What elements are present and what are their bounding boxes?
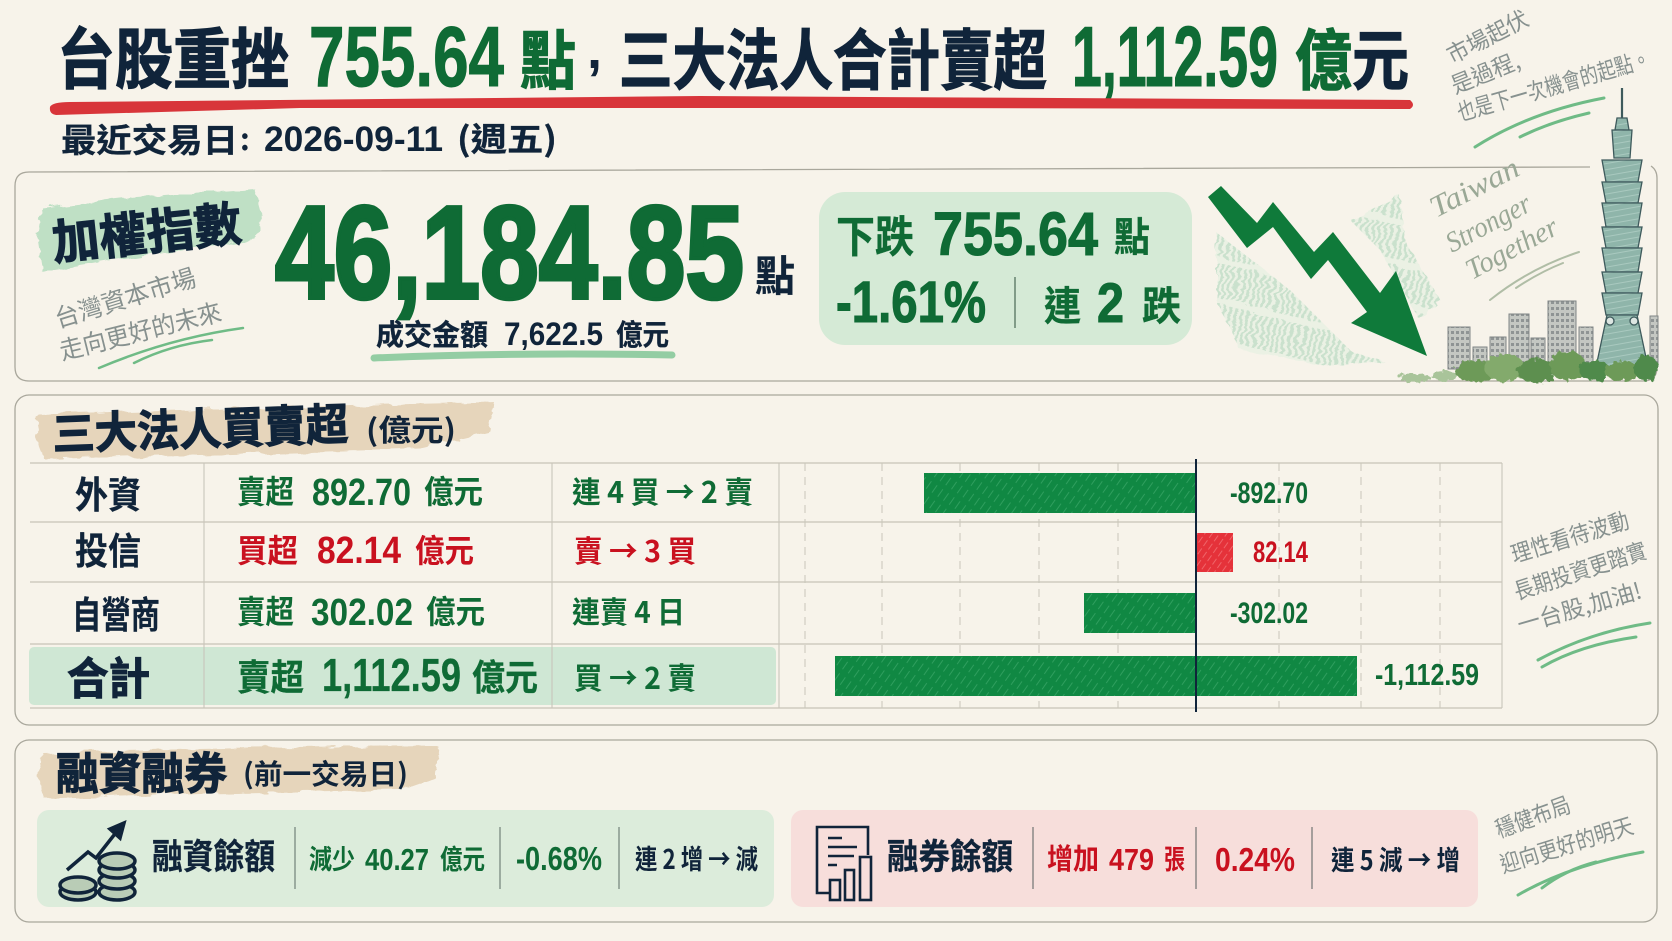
turnover: 億元: [616, 312, 669, 354]
heading: 三大法人買賣超: (億元): [366, 406, 456, 450]
row: investment trust: 投信: [75, 521, 141, 575]
row: foreign investors: 外資: [75, 465, 141, 519]
bar: total -1,112.59: [835, 656, 1479, 696]
row: dealers: 自營商: [72, 585, 160, 639]
change box: 2: [1097, 271, 1124, 334]
bar: foreign -892.70: -892.70: [1230, 477, 1308, 510]
card: short balance: 增加: [1047, 836, 1099, 878]
row: foreign investors: [75, 465, 753, 519]
turnover: 7,622.5: [504, 316, 603, 352]
change box: 跌: [1142, 274, 1181, 332]
change box: 755.64: [933, 200, 1098, 268]
handwritten: Taiwan Stronger Together: Together: [1460, 211, 1564, 286]
latest trading date: 2026-09-11: [264, 120, 443, 159]
index unit: 點: [755, 243, 795, 304]
big index value: 46,184.85: [275, 179, 744, 326]
handwritten note: steady layout: 穩健布局: [1490, 786, 1575, 845]
handwritten note: rational view: 理性看待波動: [1506, 502, 1633, 570]
card: margin balance: -0.68%: [516, 840, 602, 877]
latest trading date: (週五): [457, 113, 557, 161]
title: 755.64: [309, 10, 504, 105]
illustration: city skyline: [1448, 301, 1658, 369]
row: total: 買 → 2 賣: [574, 654, 696, 698]
title: 三大法人合計賣超: [619, 8, 1047, 104]
change box: [819, 192, 1192, 345]
illustration: tree line: [1399, 351, 1658, 383]
panel: margin: [15, 738, 1657, 922]
handwritten note: capital market: [50, 259, 243, 368]
title: ,: [587, 20, 602, 80]
row: investment trust: 億元: [415, 526, 474, 572]
illustration: Taipei 101: [1596, 88, 1648, 367]
heading: 三大法人買賣超: [36, 389, 494, 463]
change box: 下跌: [836, 201, 914, 265]
card: margin balance: 連 2 增 → 減: [635, 838, 758, 877]
icon: report with bars: [817, 827, 871, 900]
row: total: [67, 643, 696, 707]
card: margin balance: 融資餘額: [152, 829, 275, 880]
row: dealers: 賣超: [237, 587, 294, 633]
heading: 三大法人買賣超: 三大法人買賣超: [51, 389, 349, 463]
handwritten note: steady layout: [1490, 786, 1643, 895]
row: total: 億元: [472, 649, 538, 701]
heading: 融資融券: (前一交易日): [243, 753, 408, 793]
handwritten note: rational view: [1506, 502, 1650, 667]
row: foreign investors: 連 4 買 → 2 賣: [572, 468, 753, 512]
card: short balance: 479: [1109, 842, 1154, 877]
panel border: institutional: [15, 395, 1658, 725]
icon: falling zigzag arrow: [1208, 186, 1427, 356]
change box: 點: [1114, 205, 1150, 263]
title: 元: [1352, 8, 1409, 104]
panel: institutional investors: [15, 389, 1658, 725]
total row highlight: [29, 647, 776, 705]
card: short balance: 0.24%: [1215, 841, 1295, 878]
handwritten note: top right: 市場起伏: [1440, 0, 1534, 70]
row: dealers: 302.02: [311, 592, 413, 634]
handwritten note: rational view: 一台股,加油!: [1513, 572, 1645, 640]
row: investment trust: [75, 521, 696, 575]
row: total: 賣超: [237, 649, 304, 701]
latest trading date: :: [240, 115, 250, 159]
card: short balance: 張: [1164, 838, 1185, 877]
latest trading date: [61, 113, 557, 162]
change box: 連: [1044, 274, 1081, 332]
handwritten: Taiwan Stronger Together: Stronger: [1440, 187, 1537, 259]
row: dealers: 連賣 4 日: [572, 588, 685, 632]
row: total: 合計: [67, 643, 150, 707]
card: short balance: [791, 810, 1478, 907]
turnover: 成交金額: [376, 312, 488, 354]
row: foreign investors: 億元: [424, 467, 483, 513]
handwritten note: top right: 是過程,: [1445, 42, 1524, 100]
bar: trust 82.14: 82.14: [1253, 536, 1308, 569]
chart axis: [1195, 459, 1197, 712]
title: 1,112.59: [1072, 10, 1278, 105]
card: margin balance: 減少: [309, 838, 355, 877]
row: total: 1,112.59: [322, 649, 461, 701]
row: dealers: 億元: [426, 587, 485, 633]
latest trading date: 最近交易日: [61, 114, 238, 162]
table grid lines: [30, 463, 1502, 708]
title: 點: [520, 11, 576, 103]
handwritten note: steady layout: 迎向更好的明天: [1495, 807, 1637, 880]
title: 億: [1295, 8, 1352, 104]
decorative pale hatch behind arrow: [1216, 195, 1440, 365]
row: investment trust: 買超: [237, 526, 298, 572]
panel border: margin: [15, 740, 1657, 922]
heading: 融資融券: [38, 738, 438, 802]
title: [57, 7, 1409, 105]
handwritten note: capital market: 走向更好的未來: [55, 293, 225, 368]
heading: 融資融券: 融資融券: [56, 738, 227, 802]
row: foreign investors: 892.70: [312, 472, 411, 514]
card: margin balance: 40.27: [365, 842, 429, 877]
heading brush: 加權指數: 加權指數: [48, 184, 244, 274]
bar: total -1,112.59: -1,112.59: [1375, 657, 1479, 692]
bar: foreign -892.70: [924, 473, 1308, 513]
handwritten: Taiwan Stronger Together: Taiwan: [1424, 151, 1525, 224]
icon: coins and rising arrow: [60, 823, 135, 900]
title red brush underline: [50, 96, 1413, 115]
bar: trust 82.14: [1196, 533, 1308, 572]
handwritten note: top right: [1440, 0, 1654, 147]
panel: index: [15, 88, 1658, 383]
handwritten note: capital market: 台灣資本市場: [50, 259, 200, 336]
diverging bar chart: [835, 459, 1479, 712]
title: 台股重挫: [57, 7, 289, 103]
handwritten note: rational view: 長期投資更踏實: [1509, 532, 1650, 607]
row: investment trust: 82.14: [317, 530, 401, 572]
bar: dealers -302.02: -302.02: [1230, 597, 1308, 630]
handwritten: Taiwan Stronger Together: [1424, 151, 1579, 300]
bar: dealers -302.02: [1084, 593, 1308, 633]
card: margin balance: [37, 810, 774, 907]
card: short balance: 連 5 減 → 增: [1331, 839, 1460, 878]
row: foreign investors: 賣超: [237, 467, 294, 513]
card: short balance: 融券餘額: [887, 829, 1013, 880]
panel border: index: [15, 166, 1657, 381]
card: margin balance: 億元: [440, 838, 485, 877]
change box: -1.61%: [836, 270, 986, 335]
row: investment trust: 賣 → 3 買: [574, 527, 696, 571]
turnover: [374, 312, 672, 358]
row: dealers: [72, 585, 685, 639]
